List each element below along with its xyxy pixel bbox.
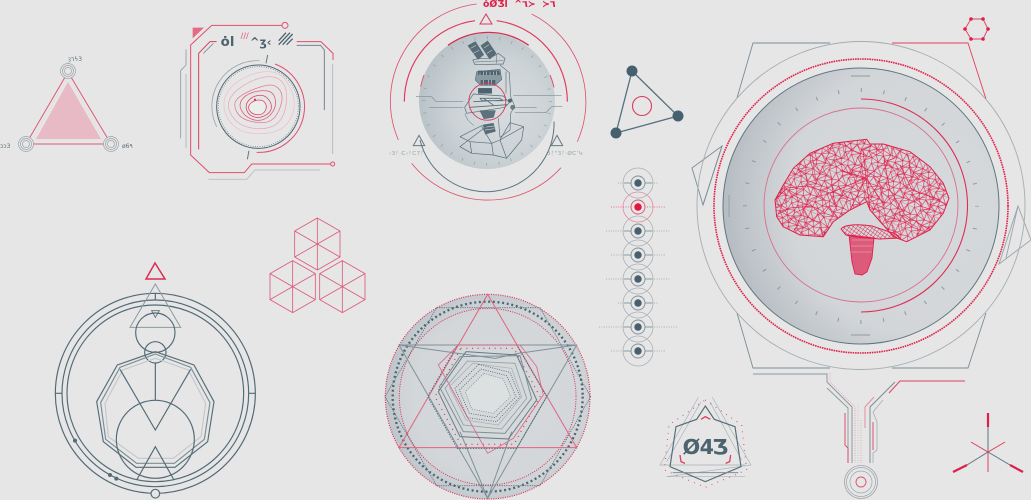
microscope circle panel: ‹3ᚠ·ᑕ‹ᚠᑕ7ᚠ <box>389 150 424 157</box>
emblem glyphs <box>683 435 728 459</box>
bottom node circle <box>844 466 878 498</box>
red arcs <box>390 4 586 200</box>
dial face <box>723 68 999 344</box>
guide lines <box>416 96 562 113</box>
cube cluster <box>270 218 365 313</box>
microscope circle panel: 3ᚠ"3ᚠ·ØᑕʹԿ <box>547 150 583 157</box>
red triangle above medallion <box>146 263 165 279</box>
microscope circle panel <box>389 0 586 200</box>
microscope <box>460 41 524 158</box>
body <box>475 69 502 85</box>
emblem glyphs: 4 <box>700 435 714 459</box>
stage <box>465 94 509 113</box>
brain dial panel <box>692 42 1031 370</box>
panel: contour map frame: ^ʒ‹ <box>250 35 271 49</box>
triangle diagram: top left: ø6٩ <box>122 143 133 150</box>
contour lines <box>224 72 294 134</box>
sacred geometry circle <box>385 294 591 499</box>
outer circle <box>697 42 1025 370</box>
icon: red hexagon <box>963 17 990 41</box>
red ring on microscope <box>469 83 506 120</box>
head <box>473 53 505 65</box>
panel: contour map frame <box>181 22 335 179</box>
arm <box>498 65 515 137</box>
outer brackets <box>692 43 1031 368</box>
vertical node column <box>599 168 677 366</box>
emblem glyphs: Ʒ <box>712 435 728 459</box>
icon: three axis star <box>953 413 1023 472</box>
brain wireframe <box>774 138 950 242</box>
triangle diagram: top left: ȝ٦ϟ3 <box>68 56 82 63</box>
emblem glyphs: Ø <box>683 435 700 459</box>
contour circle <box>212 55 305 159</box>
panel heading glyphs: ȯl <box>221 35 234 50</box>
funnel connector <box>753 373 965 463</box>
condenser and lamp <box>480 111 495 119</box>
triangle diagram: top left <box>0 56 133 152</box>
eyepieces <box>468 41 496 59</box>
panel: contour map frame: /// <box>241 31 249 40</box>
triangles and labels <box>480 14 492 24</box>
node triangle <box>610 66 684 138</box>
triangle diagram: top left: ɔɔ3 <box>0 143 11 150</box>
emblem <box>660 397 751 487</box>
brain stem <box>841 225 900 275</box>
base <box>460 123 524 158</box>
medallion: bottom left <box>55 284 255 498</box>
